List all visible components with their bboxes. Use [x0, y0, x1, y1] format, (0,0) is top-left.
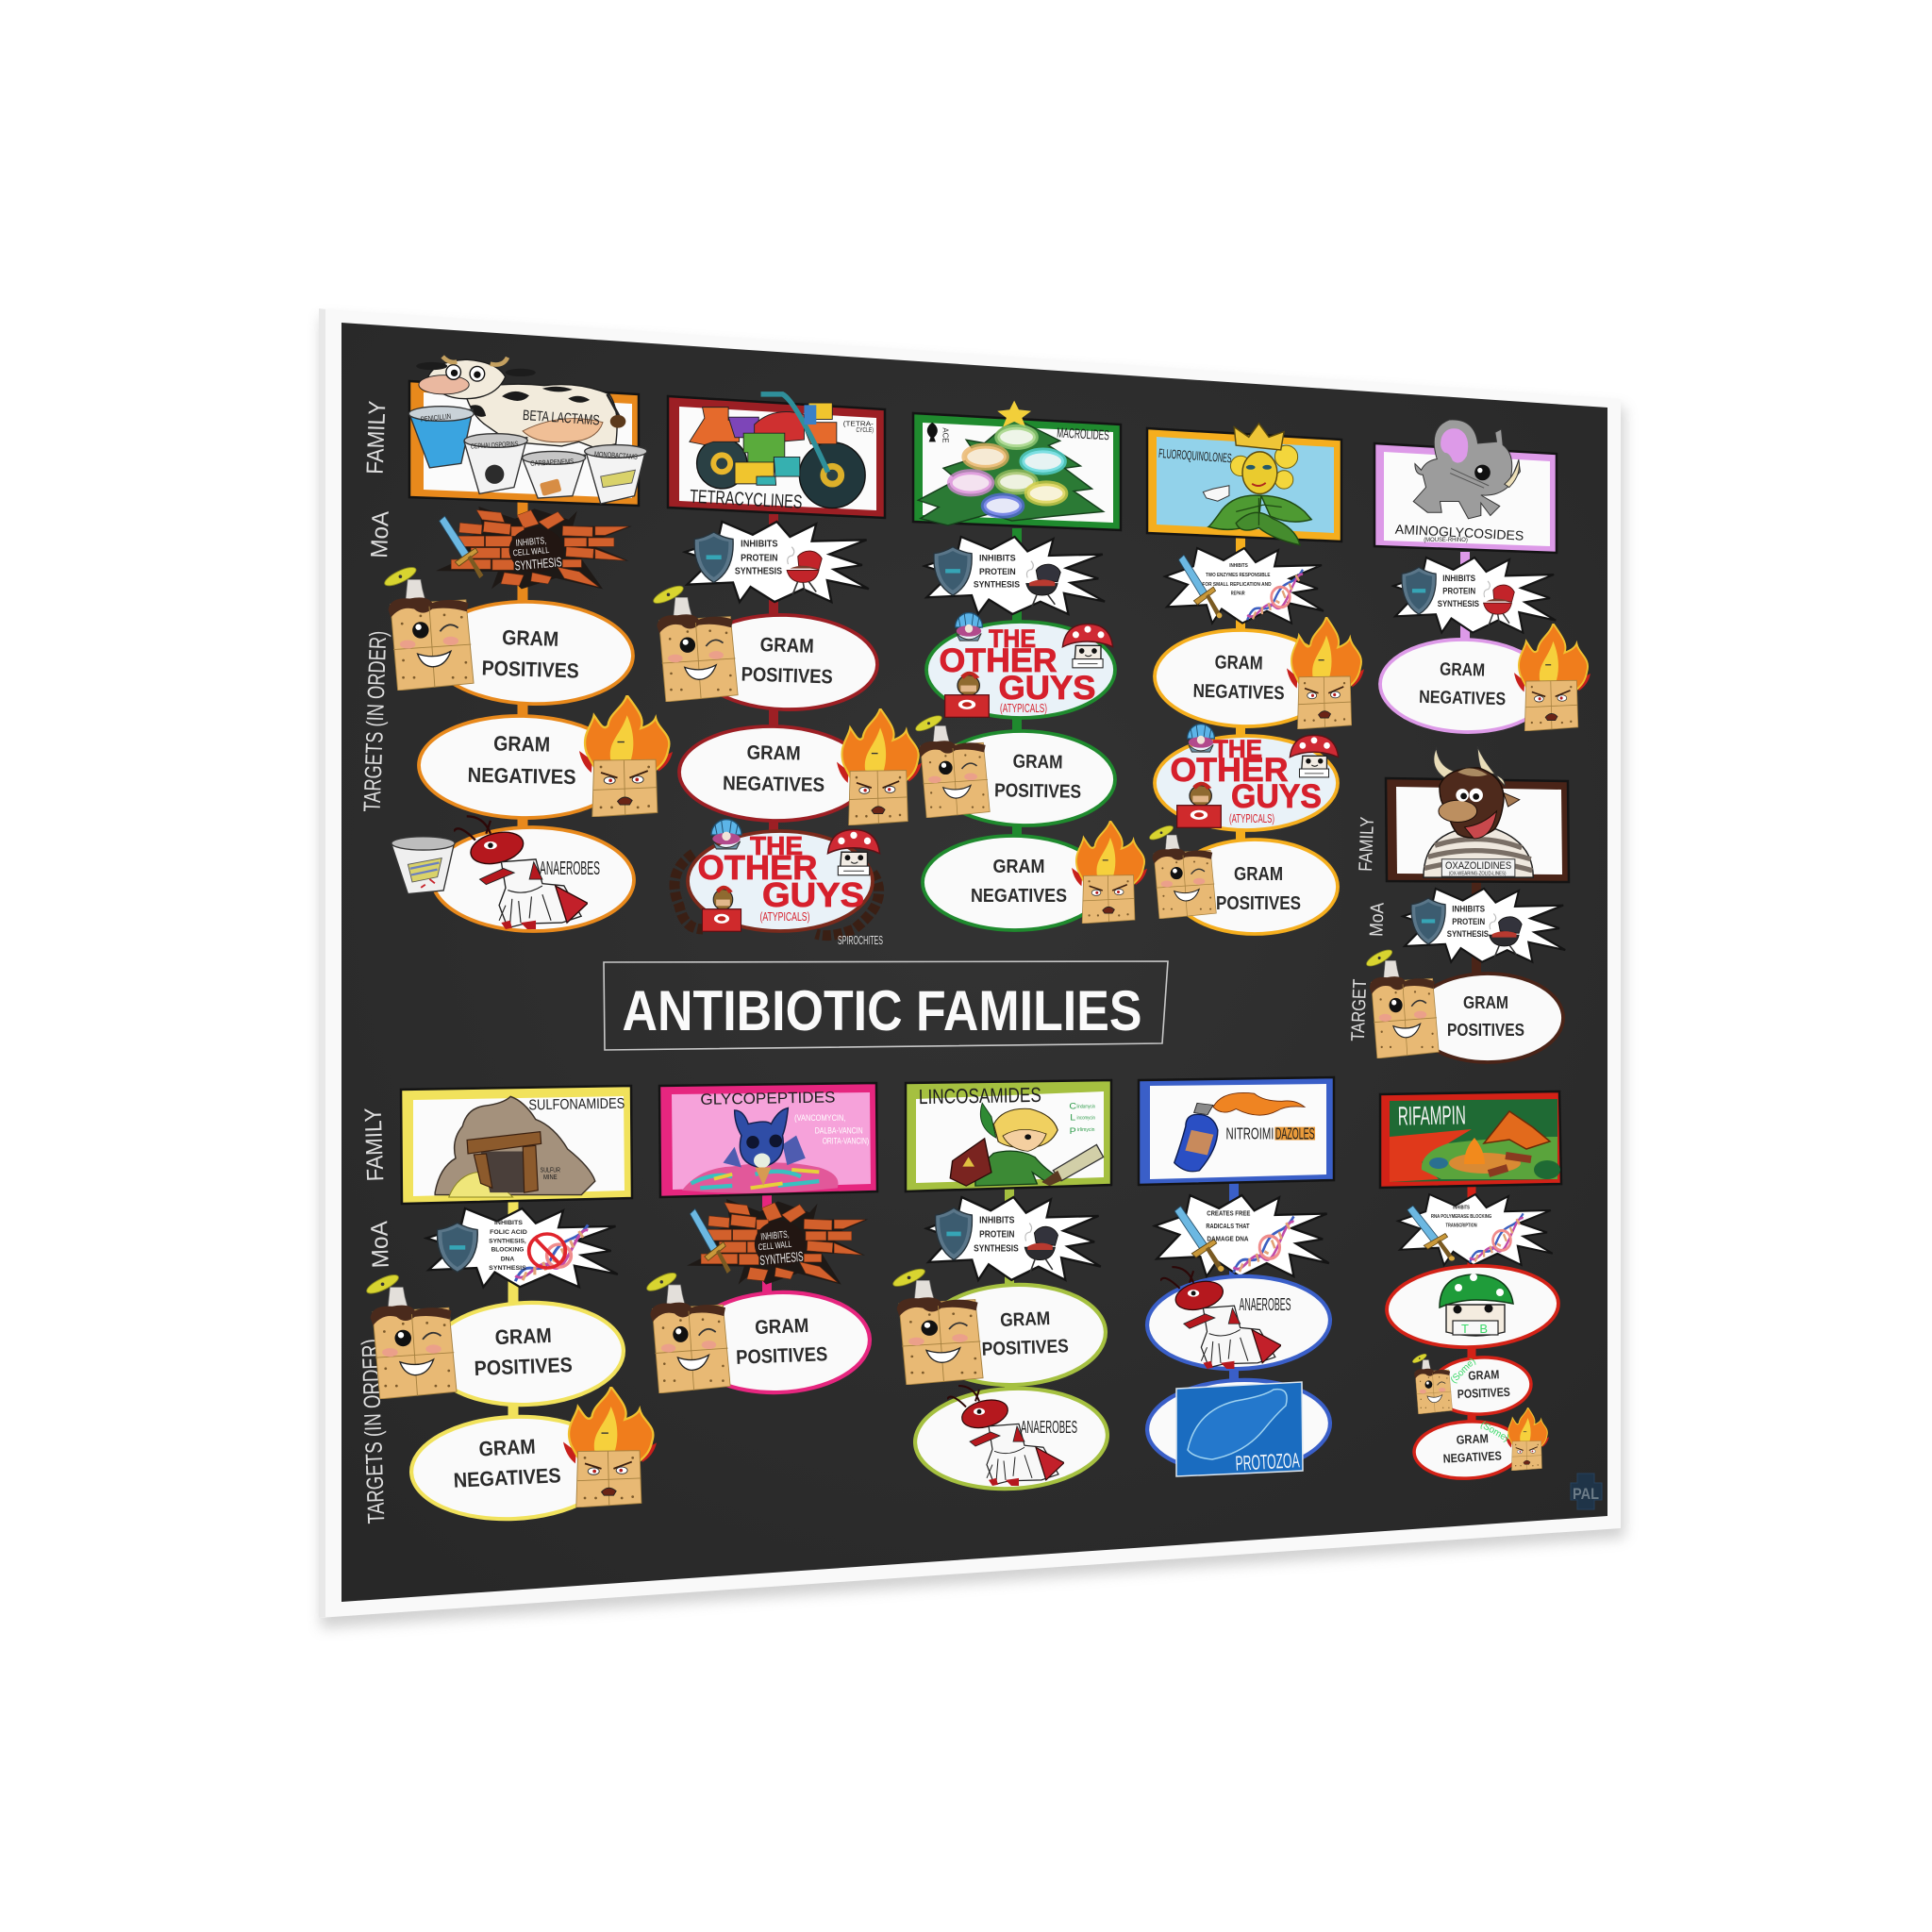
MoA burst: INHIBITS	[979, 1215, 1015, 1226]
target: gram positives: POSITIVES	[481, 656, 579, 683]
target: gram negatives: GRAM	[992, 857, 1045, 877]
cow illustration and buckets: MONOBACTAMS	[594, 450, 638, 461]
mouse rhino illustration	[1395, 420, 1524, 543]
target: some gram negatives: (Some)	[1478, 1420, 1510, 1444]
target: gram negatives: NEGATIVES	[723, 773, 824, 796]
side label target: TARGET	[1348, 978, 1371, 1041]
MoA burst with sword and DNA	[1155, 1195, 1329, 1276]
target: gram negatives: GRAM	[478, 1435, 536, 1460]
title box	[604, 961, 1168, 1050]
MoA burst: INHIBITS	[1442, 574, 1475, 583]
MoA burst: INHIBITS	[1452, 904, 1485, 913]
target: the other guys: GUYS	[998, 670, 1096, 707]
sulfur mine illustration: SULFONAMIDES	[528, 1096, 625, 1113]
connector	[1468, 1183, 1475, 1429]
motorcycle illustration: (TETRA-	[843, 421, 874, 427]
dirt clearing	[1449, 1153, 1521, 1174]
MoA burst	[1393, 558, 1556, 633]
column: nitroimidazoles	[1139, 1077, 1334, 1476]
target: gram positives: POSITIVES	[474, 1353, 573, 1380]
target: gram positives	[1148, 824, 1338, 934]
target: some gram positives: GRAM	[1468, 1367, 1500, 1383]
target: the other guys: THE	[989, 625, 1036, 653]
MoA burst with sword and DNA: TWO ENZYMES RESPONSIBLE	[1206, 573, 1271, 578]
tent	[1484, 1111, 1550, 1149]
target: gram negatives	[1154, 617, 1364, 729]
target: gram negatives: GRAM	[1214, 652, 1263, 675]
MoA burst with shield and no-DNA sign: DNA	[501, 1257, 515, 1262]
label: family: FAMILY	[360, 1108, 389, 1182]
target: gram positives	[382, 564, 635, 708]
bat and candy illustration: ORITA-VANCIN)	[823, 1136, 869, 1145]
family box: glycopeptides	[659, 1083, 877, 1197]
label: family: FAMILY	[362, 400, 391, 475]
MoA burst with sword and DNA: CREATES FREE	[1207, 1208, 1251, 1217]
ace of spades: ACE	[941, 427, 949, 442]
MoA burst with sword and DNA: RNA POLYMERASE BLOCKING	[1431, 1214, 1491, 1220]
target: gram positives	[914, 713, 1116, 827]
green tunic hero illustration: L	[1070, 1113, 1076, 1123]
target: gram positives: POSITIVES	[741, 663, 833, 689]
family name: LINCOSAMIDES	[919, 1083, 1041, 1108]
family box: tetracyclines	[668, 394, 885, 518]
christmas tree illustration: MACROLIDES	[1057, 425, 1109, 443]
target: gram negatives: NEGATIVES	[1419, 688, 1506, 709]
motorcycle illustration: CYCLE)	[857, 427, 874, 434]
motorcycle illustration: TETRACYCLINES	[690, 487, 803, 513]
target: gram negatives: GRAM	[1440, 659, 1485, 681]
connector	[762, 1191, 772, 1316]
target: gram positives: GRAM	[1234, 864, 1283, 885]
connector	[1229, 1180, 1239, 1406]
MoA brick burst: INHIBITS,	[760, 1229, 790, 1243]
target: gram positives: POSITIVES	[1447, 1021, 1524, 1040]
side labels for top left block	[359, 400, 394, 812]
target: gram negatives	[678, 708, 922, 825]
label: MoA: MoA	[366, 510, 394, 558]
MoA burst: SYNTHESIS	[1438, 599, 1479, 608]
target: gram negatives	[418, 695, 673, 820]
target: the other guys with spirochetes: THE	[750, 831, 803, 860]
side labels for bottom left block	[358, 1108, 394, 1524]
red river	[1390, 1129, 1472, 1182]
connector	[1236, 538, 1245, 840]
bat and candy illustration: (VANCOMYCIN,	[794, 1113, 845, 1123]
MoA burst with shield and no-DNA sign: BLOCKING	[491, 1247, 524, 1253]
green tunic hero illustration: C	[1069, 1102, 1076, 1111]
column: aminoglycosides	[1374, 420, 1591, 734]
MoA burst: PROTEIN	[979, 566, 1016, 576]
column: beta lactams	[382, 357, 673, 932]
family box: fluoroquinolones	[1147, 424, 1341, 545]
MoA brick burst	[687, 1199, 868, 1285]
target: the other guys: THE	[1213, 735, 1262, 763]
MoA burst with sword and DNA	[1398, 1194, 1553, 1265]
MoA burst with sword and DNA	[1165, 548, 1324, 624]
motorcycle illustration	[690, 394, 874, 513]
MoA burst: PROTEIN	[1442, 587, 1475, 596]
target: gram negatives	[923, 821, 1147, 931]
left frame edge	[319, 308, 325, 1618]
green tunic hero illustration: irlimycin	[1077, 1128, 1094, 1133]
MoA burst	[685, 522, 869, 602]
MoA brick burst: CELL WALL	[758, 1239, 792, 1252]
target: gram positives: GRAM	[1463, 993, 1508, 1012]
dark board background	[341, 323, 1607, 1602]
ace of spades	[927, 423, 949, 442]
barrel	[1429, 1158, 1448, 1169]
column: lincosamides	[891, 1080, 1111, 1493]
MoA burst with sword and DNA: INHIBITS	[1453, 1205, 1470, 1210]
cow illustration and buckets: BETA LACTAMS	[522, 408, 600, 429]
MoA burst	[924, 537, 1105, 614]
target: anaerobes: ANAEROBES	[1021, 1418, 1077, 1437]
MoA burst: INHIBITS	[979, 553, 1016, 563]
bat and candy illustration: DALBA-VANCIN	[815, 1126, 863, 1136]
family box: macrolides	[913, 401, 1121, 530]
target: the other guys: (ATYPICALS)	[1000, 701, 1047, 715]
family name: RIFAMPIN	[1398, 1100, 1466, 1131]
target: gram positives: GRAM	[1000, 1308, 1051, 1331]
target: the other guys	[926, 613, 1115, 718]
target: gram positives: GRAM	[1012, 752, 1063, 773]
flower queen illustration: FLUOROQUINOLONES	[1158, 446, 1232, 465]
column: sulfonamides	[364, 1086, 657, 1524]
green tunic hero illustration: incomycin	[1077, 1116, 1095, 1121]
connector	[769, 514, 778, 840]
target: gram positives	[651, 583, 879, 712]
MoA burst with shield and no-DNA sign	[426, 1208, 618, 1287]
connector	[508, 1198, 519, 1453]
column: oxazolidines	[1348, 746, 1569, 1062]
target: gram negatives	[1379, 624, 1591, 734]
target: gram negatives	[408, 1387, 657, 1524]
column: rifampin	[1380, 1091, 1561, 1481]
label: MoA: MoA	[366, 1220, 394, 1269]
green tunic hero illustration: P	[1070, 1127, 1076, 1137]
mouse rhino illustration: AMINOGLYCOSIDES	[1395, 522, 1524, 543]
target: gram positives: POSITIVES	[736, 1343, 828, 1369]
MoA burst: SYNTHESIS	[735, 567, 782, 577]
green tunic hero illustration: lindamycin	[1077, 1105, 1095, 1109]
MoA burst: SYNTHESIS	[1447, 929, 1489, 939]
MoA burst with shield and no-DNA sign: INHIBITS	[494, 1220, 524, 1226]
MoA burst: PROTEIN	[1452, 917, 1485, 926]
MoA burst with sword and DNA: RADICALS THAT	[1206, 1222, 1250, 1230]
campfire	[1464, 1138, 1485, 1164]
spirochetes note: SPIROCHITES	[838, 933, 883, 947]
target: anaerobes: ANAEROBES	[540, 858, 600, 879]
target: gram negatives: GRAM	[493, 731, 550, 757]
target: anaerobes	[1145, 1267, 1332, 1372]
MoA burst with sword and DNA: REPAIR	[1231, 591, 1245, 597]
MoA burst: PROTEIN	[979, 1229, 1015, 1241]
MoA burst with shield and no-DNA sign: SYNTHESIS	[489, 1265, 526, 1272]
PAL logo	[1571, 1474, 1602, 1509]
target: some gram positives	[1411, 1352, 1532, 1416]
target: anaerobes: ANAEROBES	[1240, 1295, 1291, 1314]
target: the other guys	[1155, 724, 1339, 830]
target: protozoa	[1145, 1376, 1332, 1476]
bull in prison stripes	[1424, 746, 1533, 877]
target: gram positives	[644, 1270, 872, 1396]
christmas tree illustration	[918, 401, 1109, 525]
sulfur mine illustration	[435, 1096, 625, 1197]
camp ground	[1422, 1137, 1557, 1179]
MoA burst with sword and DNA: FOR SMALL REPLICATION AND	[1202, 582, 1272, 588]
MoA burst with shield and no-DNA sign: SYNTHESIS,	[489, 1239, 526, 1244]
PAL logo: PAL	[1573, 1485, 1599, 1503]
target: the other guys: GUYS	[1231, 778, 1322, 815]
NOS bottle with flame	[1174, 1092, 1315, 1172]
bull in prison stripes: OXAZOLIDINES	[1445, 860, 1511, 872]
MoA burst with shield and no-DNA sign: FOLIC ACID	[490, 1229, 527, 1236]
bat and candy illustration: GLYCOPEPTIDES	[700, 1089, 836, 1108]
MoA burst	[926, 1197, 1101, 1280]
MoA burst: INHIBITS	[741, 540, 778, 550]
target: protozoa: PROTOZOA	[1235, 1448, 1300, 1475]
bat and candy illustration	[682, 1089, 869, 1193]
connector	[1472, 877, 1481, 986]
cow illustration and buckets: PENICILLIN	[421, 412, 451, 424]
page shadow	[321, 317, 1624, 1628]
target: some gram negatives: GRAM	[1456, 1431, 1489, 1447]
target: the other guys with spirochetes: OTHER	[698, 848, 818, 887]
MoA burst: SYNTHESIS	[974, 1243, 1019, 1255]
bull in prison stripes: (OX-WEARING-ZOLID-LINES)	[1449, 872, 1507, 877]
family box: nitroimidazoles	[1139, 1077, 1334, 1185]
target: gram positives	[364, 1272, 625, 1408]
MoA burst with sword and DNA: INHIBITS	[1229, 563, 1248, 569]
family box: nitroimidazoles: DAZOLES	[1275, 1124, 1315, 1143]
MoA burst: PROTEIN	[741, 553, 778, 563]
family box: oxazolidines	[1386, 746, 1569, 882]
family box: sulfonamides	[401, 1086, 632, 1204]
target: TB mushroom	[1385, 1262, 1560, 1351]
cow illustration and buckets: CEPHALOSPORINS	[471, 440, 519, 451]
green tunic hero illustration	[950, 1102, 1104, 1186]
cow illustration and buckets: CARBAPENEMS	[530, 457, 574, 468]
sulfur mine illustration: MINE	[543, 1173, 558, 1181]
target: gram positives: POSITIVES	[994, 780, 1081, 803]
MoA burst	[1403, 889, 1565, 962]
MoA burst with sword and DNA: TRANSCRIPTION	[1446, 1223, 1477, 1228]
target: the other guys with spirochetes	[675, 820, 880, 936]
target: gram negatives: GRAM	[746, 741, 801, 765]
side label family: FAMILY	[1356, 816, 1378, 872]
target: gram negatives: NEGATIVES	[971, 886, 1067, 907]
family box: beta lactams	[408, 357, 647, 506]
target: gram negatives: NEGATIVES	[1192, 681, 1285, 704]
label: targets in order: TARGETS (IN ORDER)	[358, 1339, 390, 1524]
sulfur mine illustration: SULFUR	[541, 1165, 560, 1174]
NOS bottle with flame: NITROIMI	[1226, 1124, 1274, 1143]
connector	[517, 500, 528, 840]
target: gram negatives: NEGATIVES	[467, 763, 576, 789]
cow illustration and buckets	[408, 357, 647, 504]
target: TB mushroom: TB	[1461, 1322, 1488, 1336]
white canvas frame	[319, 308, 1621, 1618]
target: the other guys: (ATYPICALS)	[1229, 811, 1274, 825]
target: gram positives: GRAM	[755, 1315, 809, 1339]
MoA brick burst: SYNTHESIS	[759, 1249, 804, 1268]
target: the other guys with spirochetes: GUYS	[762, 875, 864, 914]
target: the other guys: OTHER	[1170, 752, 1289, 789]
label: targets in order: TARGETS (IN ORDER)	[359, 630, 391, 812]
title: ANTIBIOTIC FAMILIES	[623, 979, 1141, 1042]
flower queen illustration	[1158, 424, 1311, 545]
target: gram negatives: NEGATIVES	[453, 1463, 561, 1492]
connector	[1005, 1189, 1014, 1406]
column: macrolides	[913, 401, 1147, 931]
target: anaerobes	[913, 1384, 1109, 1493]
target: the other guys: OTHER	[940, 642, 1057, 679]
MoA brick burst: SYNTHESIS	[514, 555, 562, 574]
target: gram positives: POSITIVES	[981, 1336, 1069, 1360]
mouse rhino illustration: (MOUSE-RHINO)	[1424, 538, 1468, 543]
column: tetracyclines	[651, 394, 922, 947]
target: some gram negatives: NEGATIVES	[1442, 1448, 1502, 1466]
connector	[1012, 528, 1022, 840]
target: gram positives: GRAM	[494, 1324, 552, 1349]
target: the other guys with spirochetes: (ATYPICALS)	[760, 909, 809, 924]
target: gram positives	[1365, 947, 1563, 1062]
target: some gram positives: POSITIVES	[1457, 1385, 1510, 1401]
family box: aminoglycosides	[1374, 420, 1557, 553]
MoA brick burst	[436, 507, 632, 589]
family box: lincosamides	[906, 1080, 1111, 1191]
target: some gram positives: (Some)	[1449, 1357, 1478, 1386]
target: some gram negatives	[1413, 1407, 1549, 1481]
target: gram positives: POSITIVES	[1216, 893, 1301, 914]
MoA brick burst: CELL WALL	[512, 545, 550, 558]
bush	[1534, 1160, 1560, 1179]
target: gram positives: GRAM	[759, 634, 814, 658]
column: fluoroquinolones	[1147, 424, 1364, 934]
logs	[1489, 1156, 1531, 1174]
MoA burst with sword and DNA: DAMAGE DNA	[1207, 1234, 1249, 1242]
MoA brick burst: INHIBITS,	[515, 536, 547, 549]
family box: rifampin	[1380, 1091, 1561, 1188]
MoA burst: SYNTHESIS	[974, 579, 1020, 590]
target: gram positives	[891, 1266, 1108, 1389]
connector	[1460, 552, 1470, 651]
target: anaerobes	[391, 816, 635, 932]
side label MoA: MoA	[1366, 902, 1389, 937]
target: gram positives: GRAM	[502, 625, 559, 651]
column: glycopeptides	[644, 1083, 877, 1396]
